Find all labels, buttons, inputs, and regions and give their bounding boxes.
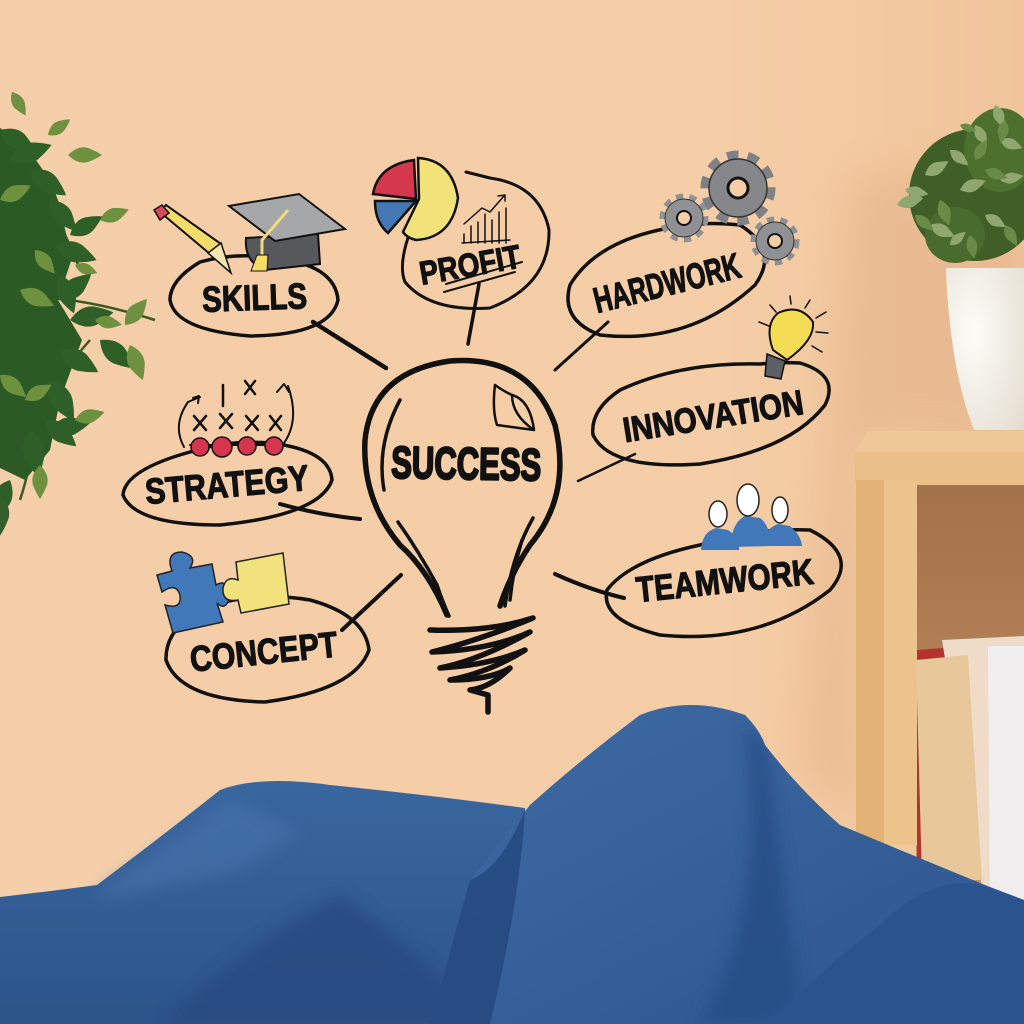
profit underline [444,262,522,292]
profit ellipse [402,172,549,308]
bubble: teamwork [555,484,841,637]
light leaves [0,89,153,499]
wall shadow near shelf [800,150,1024,820]
innovation ellipse [593,363,829,465]
icon: large gear [706,156,770,220]
innovation pointer [578,454,635,481]
teamwork ellipse [606,530,841,637]
skills label: SKILLS [201,275,308,320]
strategy ellipse [123,442,332,525]
teamwork pointer [555,574,624,598]
bulb screw scribble [430,618,533,712]
concept label: CONCEPT [188,623,339,680]
dark leaves [0,122,140,524]
shelf top [855,431,1024,456]
bulb outline [365,361,560,615]
strategy pointer [280,504,360,519]
bag left lobe [0,781,540,1024]
potted plant [895,103,1024,430]
skills pointer [313,322,386,368]
hardwork ellipse [568,224,765,336]
bubble: skills [154,194,386,368]
bulb highlight [494,385,534,430]
icon: mini bar chart [462,195,510,243]
bag left fold [165,895,480,1024]
icon: small light bulb [759,296,828,379]
skills ellipse [170,256,338,336]
teamwork label: TEAMWORK [634,551,815,610]
heading: success: SUCCESS [391,437,542,490]
bubble: concept [157,552,401,702]
bean bag [0,705,1024,1024]
left plant [0,89,155,536]
pot [946,268,1024,430]
icon: yellow puzzle piece [223,553,289,613]
concept ellipse [166,597,369,702]
dark foliage mass [0,128,82,480]
shelf post [856,480,917,845]
bag left highlight [100,800,300,900]
icon: small gear left [663,197,705,239]
decal: central light bulb [365,361,560,712]
hardwork pointer [555,322,608,370]
bubble: profit [373,158,549,344]
shelf interior [916,484,1024,904]
bubble: strategy [123,381,360,525]
bubble: hardwork [555,156,796,370]
icon: blue puzzle piece [157,552,230,633]
innovation label: INNOVATION [620,383,806,450]
bag right lobe [770,883,1024,1024]
icon: team of three people [701,484,802,550]
bubble: innovation [578,296,829,481]
profit pointer [468,284,479,344]
shelf front rail [855,452,1024,485]
icon: pencil [154,205,231,273]
bag centre lobe [430,705,1024,1024]
strategy label: STRATEGY [143,457,310,512]
hardwork label: HARDWORK [589,245,745,321]
profit label: PROFIT [417,238,523,292]
books [916,636,1024,906]
icon: tactics board [179,381,293,457]
icon: pie chart [373,158,458,240]
foliage [895,103,1024,263]
icon: small gear right [754,220,796,262]
bag crease [430,810,525,1024]
stems [0,150,155,500]
bookshelf [855,431,1024,906]
bag centre fold right [709,730,796,1022]
tip leaf [0,495,9,536]
concept pointer [342,575,401,630]
icon: graduation cap [229,194,345,271]
